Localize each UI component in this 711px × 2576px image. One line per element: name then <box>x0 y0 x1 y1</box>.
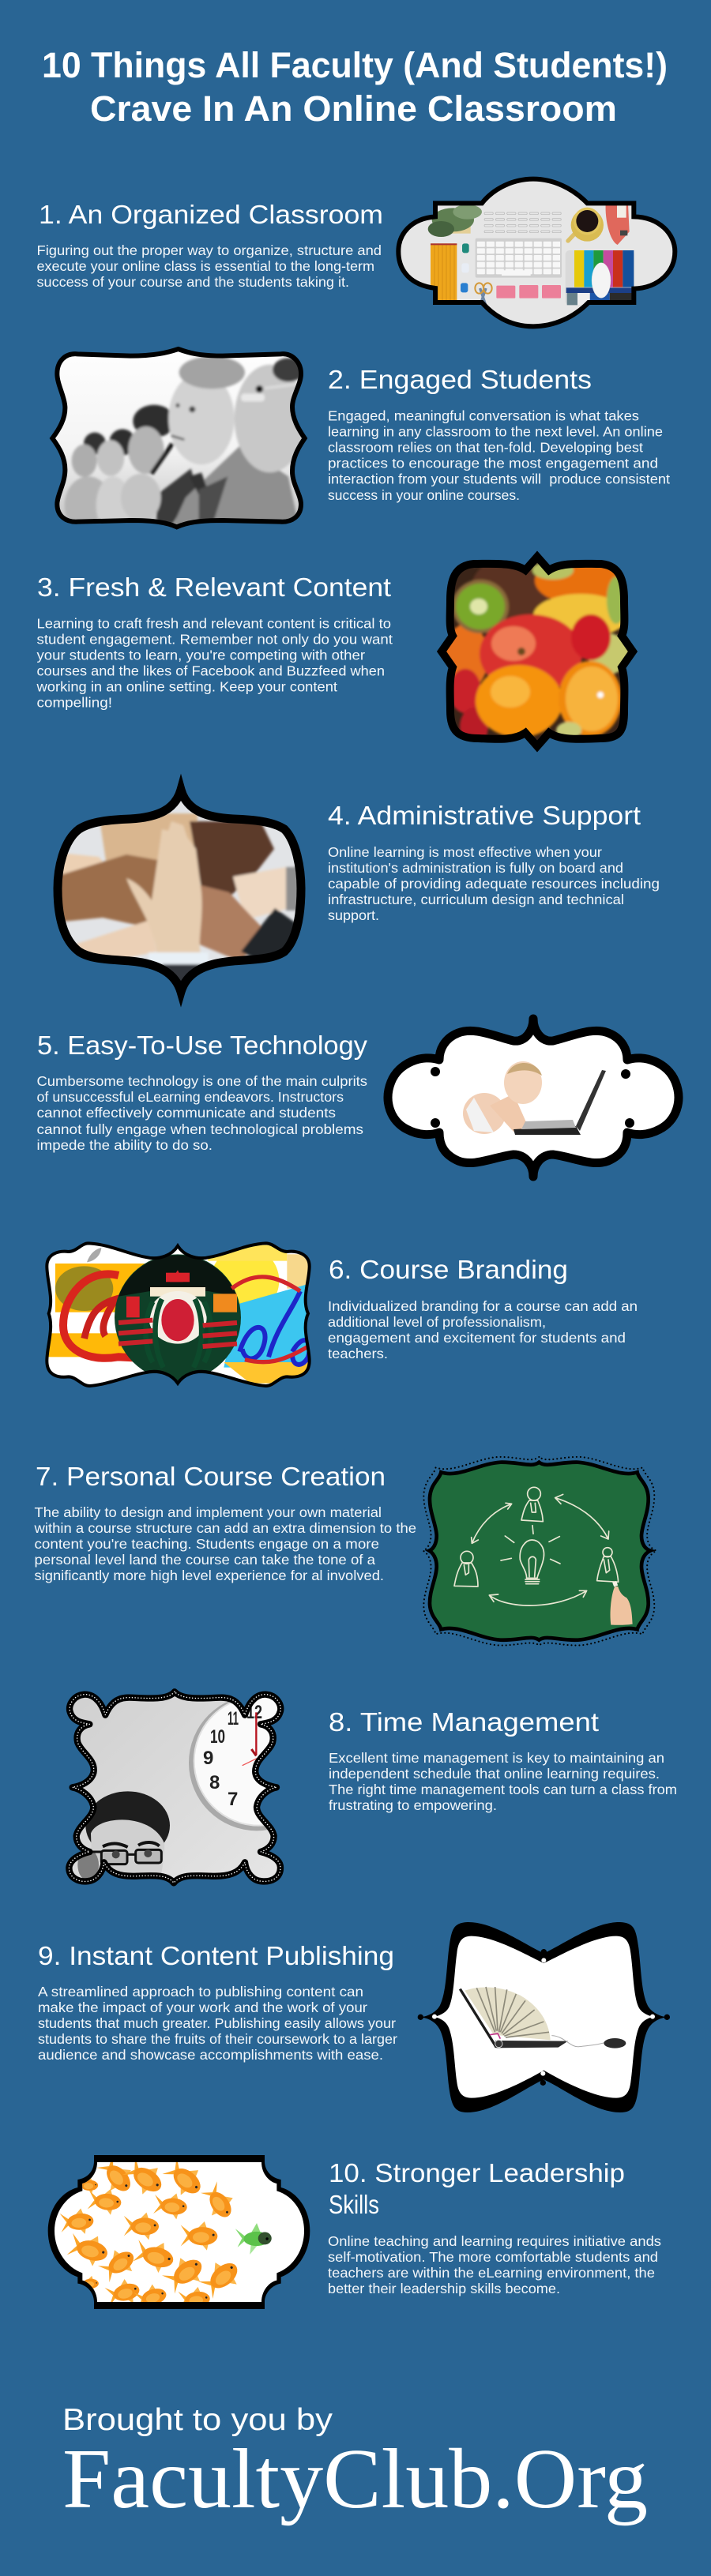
image: stacked hands in frame <box>47 782 308 999</box>
text block 3: Learning to craft fresh and relevant content is critical to <box>36 616 391 632</box>
text block 1: execute your online class is essential to the long-term <box>36 258 374 274</box>
text block 10: teachers are within the eLearning environment, the <box>328 2265 655 2281</box>
text block 8 <box>329 1750 677 1813</box>
text block 10 <box>328 2233 661 2296</box>
footer: brought to you by: Brought to you by <box>62 2403 333 2437</box>
panel: 7 personal course creation <box>33 1457 656 1646</box>
text block 3 <box>36 616 393 711</box>
icon: green fish <box>235 2223 272 2255</box>
heading 1: 1. An Organized Classroom <box>39 200 383 229</box>
text block 5: Cumbersome technology is one of the main culprits <box>36 1073 367 1089</box>
text block 5: cannot fully engage when technological problems <box>36 1121 363 1137</box>
image: baby at laptop in ornate frame <box>388 1019 679 1177</box>
text block 1 <box>36 242 382 290</box>
text block 10: self-motivation. The more comfortable students and <box>328 2249 658 2265</box>
text block 9: audience and showcase accomplishments with ease. <box>38 2047 383 2063</box>
text block 6: engagement and excitement for students and <box>328 1330 626 1346</box>
text block 8: frustrating to empowering. <box>329 1797 497 1813</box>
text block 7: content you're teaching. Students engage on a more <box>35 1536 379 1552</box>
text block 3: working in an online setting. Keep your content <box>36 679 337 695</box>
text block 2: practices to encourage the most engagement and <box>328 455 658 471</box>
image: fruit in frame <box>434 553 640 750</box>
text block 5: cannot effectively communicate and students <box>36 1105 336 1121</box>
image: clock and man in frame: 9 <box>203 1748 213 1769</box>
heading 9: 9. Instant Content Publishing <box>38 1941 394 1970</box>
heading 10: Skills <box>329 2190 379 2219</box>
text block 8: Excellent time management is key to maintaining an <box>329 1750 664 1766</box>
image: clock and man in frame <box>66 1688 284 1886</box>
image: laptop book in bracket frame <box>418 1922 670 2112</box>
panel: 9 instant content publishing <box>38 1922 670 2112</box>
image: goldfish in frame <box>48 2152 310 2313</box>
heading 3: 3. Fresh & Relevant Content <box>37 573 391 602</box>
heading 2: 2. Engaged Students <box>328 365 592 394</box>
panel: 3 fresh and relevant content <box>36 553 640 750</box>
text block 5 <box>36 1073 367 1153</box>
panel: 6 course branding <box>40 1236 638 1394</box>
panel: 8 time management <box>63 1686 677 1891</box>
text block 6: Individualized branding for a course can add an <box>328 1298 638 1314</box>
text block 7 <box>33 1504 416 1583</box>
panel: 5 easy-to-use technology <box>36 1019 679 1177</box>
image: brand logos collage in frame <box>45 1241 311 1388</box>
text block 10: better their leadership skills become. <box>328 2281 560 2296</box>
text block 3: your students to learn, you're competing with other <box>36 648 365 663</box>
image: clock and man in frame: 12 <box>246 1702 262 1723</box>
text block 4: Online learning is most effective when your <box>328 844 602 860</box>
heading 7: 7. Personal Course Creation <box>36 1462 386 1491</box>
text block 6 <box>328 1298 638 1361</box>
text block 4: support. <box>328 907 379 923</box>
panel: 10 stronger leadership skills <box>48 2152 661 2313</box>
text block 3: student engagement. Remember not only do you want <box>36 632 393 648</box>
text block 9 <box>38 1984 397 2063</box>
text block 4 <box>328 844 660 923</box>
image: clock and man in frame: 10 <box>210 1726 225 1748</box>
image: clock and man in frame: 7 <box>228 1789 238 1810</box>
heading 8: 8. Time Management <box>329 1707 599 1737</box>
text block 4: institution's administration is fully on board and <box>328 860 623 876</box>
text block 2: success in your online courses. <box>328 487 520 503</box>
text block 2: interaction from your students will produce consistent <box>328 471 670 486</box>
title: Crave In An Online Classroom <box>90 88 617 129</box>
heading 5: 5. Easy-To-Use Technology <box>37 1031 368 1060</box>
text block 3: compelling! <box>36 695 112 711</box>
footer: brought to you by <box>62 2403 648 2526</box>
panel: 4 administrative support <box>47 782 660 999</box>
text block 6: additional level of professionalism, <box>328 1314 546 1330</box>
text block 9: make the impact of your work and the work of your <box>38 2000 367 2015</box>
text block 3: courses and the likes of Facebook and Buzzfeed when <box>36 663 385 679</box>
logo text: FacultyClub.Org <box>62 2432 648 2526</box>
heading 4: 4. Administrative Support <box>328 801 641 830</box>
title <box>42 45 668 129</box>
image: clock and man in frame: 8 <box>209 1772 220 1793</box>
text block 1: Figuring out the proper way to organize, structure and <box>36 242 382 258</box>
text block 7: The ability to design and implement your own material <box>35 1504 382 1520</box>
title: 10 Things All Faculty (And Students!) <box>42 45 668 85</box>
text block 9: students that much greater. Publishing easily allows your <box>38 2015 396 2031</box>
heading 10 <box>329 2158 625 2219</box>
panel: 1 an organized classroom <box>36 170 683 336</box>
image: chalkboard diagram in dotted frame <box>423 1457 656 1646</box>
image: desk with keyboard in cloud frame <box>396 177 678 329</box>
image: clock and man in frame: 11 <box>228 1708 239 1729</box>
text block 2: classroom relies on that ten-fold. Developing best <box>328 439 643 455</box>
text block 4: infrastructure, curriculum design and technical <box>328 892 624 907</box>
text block 2: Engaged, meaningful conversation is what takes <box>328 407 639 423</box>
image: students in frame <box>49 346 308 530</box>
heading 6: 6. Course Branding <box>329 1255 568 1284</box>
text block 7: significantly more high level experience for al involved. <box>35 1568 384 1583</box>
text block 4: capable of providing adequate resources including <box>328 876 660 892</box>
text block 2 <box>328 407 670 503</box>
heading 10: 10. Stronger Leadership <box>329 2158 625 2187</box>
text block 6: teachers. <box>328 1346 388 1361</box>
text block 5: of unsuccessful eLearning endeavors. Instructors <box>36 1089 344 1105</box>
text block 1: success of your course and the students taking it. <box>36 274 349 290</box>
text block 8: The right time management tools can turn a class from <box>329 1782 677 1797</box>
text block 8: independent schedule that online learning requires. <box>329 1766 660 1782</box>
text block 2: learning in any classroom to the next level. An online <box>328 423 663 439</box>
text block 5: impede the ability to do so. <box>36 1137 213 1153</box>
text block 7: personal level land the course can take the tone of a <box>35 1552 375 1568</box>
text block 9: A streamlined approach to publishing content can <box>38 1984 363 2000</box>
text block 9: students to share the fruits of their coursework to a larger <box>38 2031 397 2047</box>
text block 7: within a course structure can add an extra dimension to the <box>33 1520 416 1536</box>
panel: 2 engaged students <box>43 340 670 537</box>
text block 10: Online teaching and learning requires initiative ands <box>328 2233 661 2249</box>
